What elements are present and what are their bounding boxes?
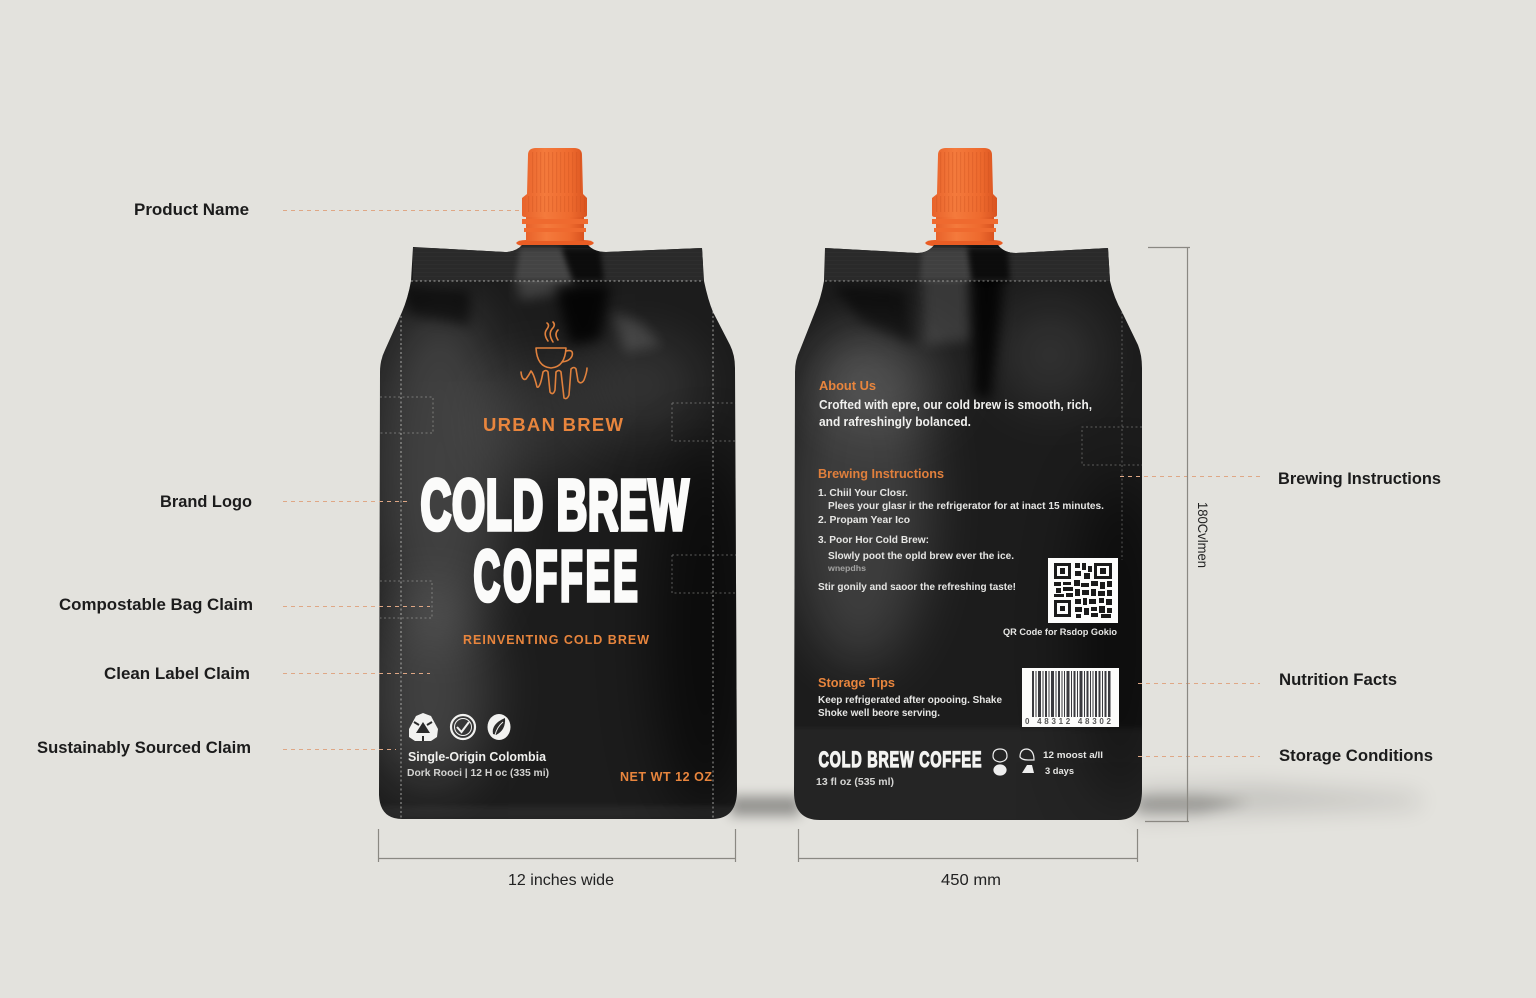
callout: brewing instructions: Brewing Instructions xyxy=(1278,469,1441,488)
origin text xyxy=(407,749,549,779)
back product name xyxy=(816,747,982,788)
storage duration xyxy=(1043,750,1103,777)
callouts right xyxy=(1278,469,1441,765)
qr code xyxy=(1048,558,1118,623)
callout: compostable: Compostable Bag Claim xyxy=(59,595,253,614)
brewing instructions: Brewing Instructions xyxy=(818,466,944,481)
barcode xyxy=(1022,668,1119,727)
callout: sustainably sourced: Sustainably Sourced Claim xyxy=(37,738,251,757)
storage tips: Storage Tips xyxy=(818,675,895,690)
brand logo: steaming cup xyxy=(521,322,587,399)
tagline: REINVENTING COLD BREW xyxy=(463,633,649,647)
brand name: URBAN BREW xyxy=(483,414,624,435)
icons: storage xyxy=(993,749,1034,775)
barcode: 0 48312 48302 xyxy=(1025,717,1112,726)
brewing instructions xyxy=(818,466,1104,593)
about us: and rafreshingly bolanced. xyxy=(819,415,971,429)
storage duration: 3 days xyxy=(1045,766,1074,777)
dieline guides front xyxy=(380,281,736,819)
dimension: front width: 12 inches wide xyxy=(508,872,614,889)
dieline guides back xyxy=(825,281,1142,560)
back product name: COLD BREW COFFEE xyxy=(818,747,982,772)
origin text: Dork Rooci | 12 H oc (335 mi) xyxy=(407,767,549,779)
brewing instructions: Slowly poot the opld brew ever the ice. xyxy=(828,550,1014,562)
about us: About Us xyxy=(819,378,876,393)
brewing instructions: Stir gonily and saoor the refreshing taste! xyxy=(818,581,1016,593)
dimension: back width xyxy=(798,829,1138,889)
storage tips: Keep refrigerated after opooing. Shake xyxy=(818,694,1002,706)
storage tips: Shoke well beore serving. xyxy=(818,707,940,719)
callout: clean label: Clean Label Claim xyxy=(104,664,250,683)
dimension: back width: 450 mm xyxy=(941,872,1001,889)
storage tips xyxy=(818,675,1002,719)
brewing instructions: 2. Propam Year Ico xyxy=(818,514,910,526)
back product name: 13 fl oz (535 ml) xyxy=(816,777,894,788)
spout cap back xyxy=(925,148,1003,246)
product title: COFFEE xyxy=(474,537,638,616)
storage duration: 12 moost a/ll xyxy=(1043,750,1103,761)
icon: leaf badge xyxy=(488,714,510,740)
brewing instructions: wnepdhs xyxy=(827,564,867,573)
dimension: front width xyxy=(378,829,736,889)
pouch body front xyxy=(370,240,755,830)
dimension: height xyxy=(1145,247,1211,822)
qr caption: QR Code for Rsdop Gokio xyxy=(1003,627,1117,638)
about us: Crofted with epre, our cold brew is smooth, rich, xyxy=(819,398,1092,412)
net weight: NET WT 12 OZ xyxy=(620,770,712,784)
panel: front pouch xyxy=(370,148,755,830)
callout: storage conditions: Storage Conditions xyxy=(1279,746,1433,765)
product title: COLD BREW xyxy=(420,467,689,545)
brewing instructions: Plees your glasr ir the refrigerator for at inact 15 minutes. xyxy=(828,500,1104,512)
brewing instructions: 1. Chiil Your Closr. xyxy=(818,487,908,499)
icon: check badge xyxy=(451,715,475,739)
callout: nutrition facts: Nutrition Facts xyxy=(1279,670,1397,689)
icon: recycling xyxy=(409,713,438,741)
callouts left xyxy=(37,200,253,757)
product title xyxy=(420,467,689,616)
spout cap front xyxy=(516,148,594,246)
callout: product name: Product Name xyxy=(134,200,249,219)
origin text: Single-Origin Colombia xyxy=(408,749,547,764)
panel: back pouch xyxy=(785,148,1165,830)
leader lines xyxy=(283,210,1260,756)
brewing instructions: 3. Poor Hor Cold Brew: xyxy=(818,534,929,546)
ground shadows xyxy=(730,786,1420,818)
pouch body back xyxy=(794,245,1142,820)
callout: brand logo: Brand Logo xyxy=(160,492,252,511)
dimension: height: 180Cvlmen xyxy=(1195,502,1211,568)
about us xyxy=(819,378,1092,429)
